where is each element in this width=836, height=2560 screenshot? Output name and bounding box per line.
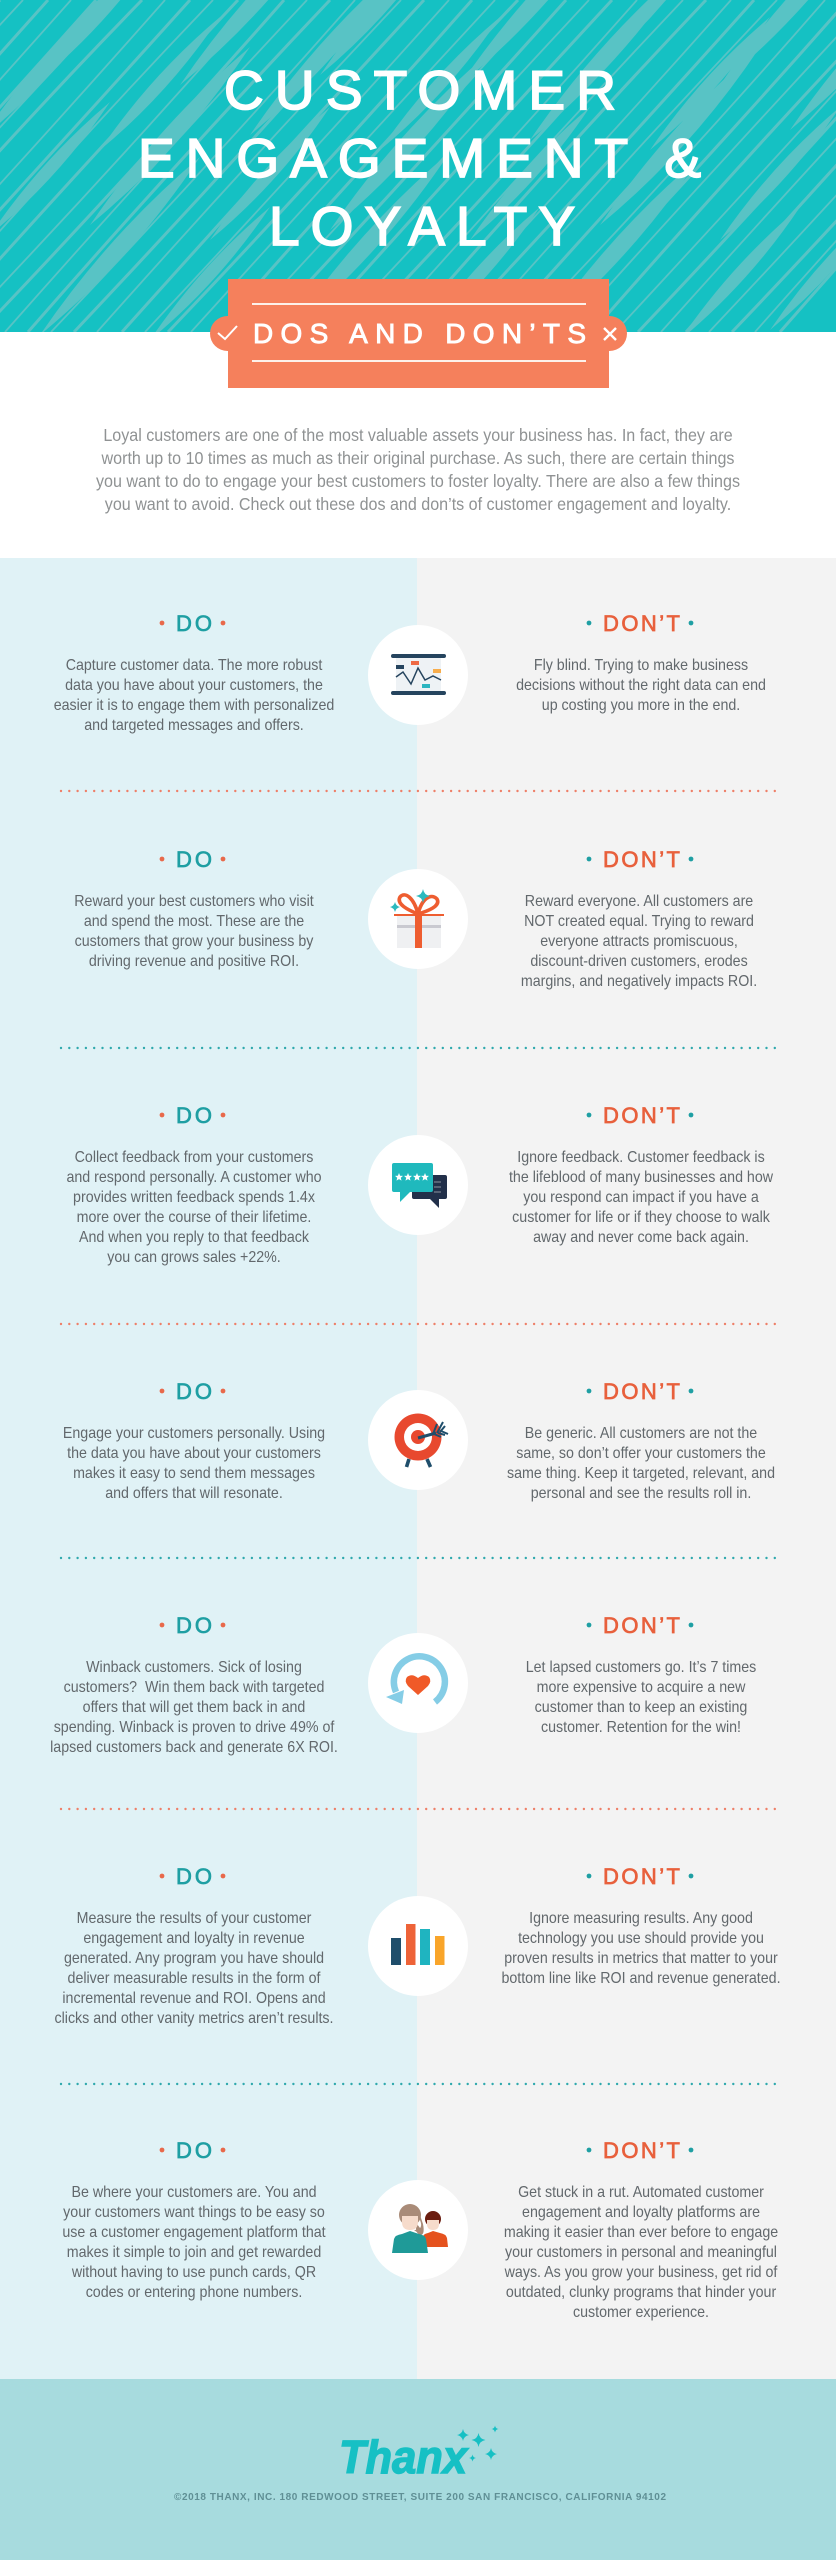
- don't text: [521, 892, 757, 990]
- intro paragraph: you want to avoid. Check out these dos and don’ts of customer engagement and loyalty.: [105, 494, 731, 514]
- don't text: engagement and loyalty platforms are: [522, 2203, 760, 2221]
- banner: dos and don'ts: [210, 279, 627, 388]
- don't text: same, so don’t offer your customers the: [516, 1444, 766, 1462]
- do text: And when you reply to that feedback: [79, 1228, 309, 1246]
- row 5: winback: [50, 1613, 757, 1756]
- don't text: up costing you more in the end.: [542, 696, 740, 714]
- row 3: feedback: [66, 1103, 773, 1266]
- icon: chart board: [368, 625, 468, 725]
- row 7: be where customers are: [62, 2138, 778, 2321]
- don't text: personal and see the results roll in.: [531, 1484, 751, 1502]
- don't text: the lifeblood of many businesses and how: [509, 1168, 773, 1186]
- do text: Collect feedback from your customers: [75, 1148, 314, 1166]
- do text: generated. Any program you have should: [64, 1949, 324, 1967]
- do text: Be where your customers are. You and: [71, 2183, 317, 2201]
- don't text: you respond can impact if you have a: [523, 1188, 759, 1206]
- DO heading: [160, 1379, 225, 1404]
- DO heading: DO: [176, 1379, 212, 1404]
- don't text: [526, 1658, 757, 1736]
- don't text: discount-driven customers, erodes: [530, 952, 748, 970]
- DO heading: DO: [176, 2138, 212, 2163]
- don't text: more expensive to acquire a new: [537, 1678, 745, 1696]
- don't text: [507, 1424, 775, 1502]
- DO heading: DO: [176, 1864, 212, 1889]
- do text: customers that grow your business by: [75, 932, 314, 950]
- footer background: [0, 2379, 836, 2560]
- header: [0, 0, 836, 388]
- do text: your customers want things to be easy so: [63, 2203, 325, 2221]
- icon: people: [368, 2180, 468, 2280]
- do text: clicks and other vanity metrics aren’t results.: [55, 2009, 333, 2027]
- DON'T heading: DON’T: [603, 611, 680, 636]
- don't text: margins, and negatively impacts ROI.: [521, 972, 757, 990]
- do text: and spend the most. These are the: [84, 912, 304, 930]
- row 4: personal engagement: [63, 1379, 775, 1502]
- do text: without having to use punch cards, QR: [71, 2263, 316, 2281]
- don't text: technology you use should provide you: [518, 1929, 764, 1947]
- title: CUSTOMER: [224, 59, 616, 121]
- DO heading: [160, 1103, 225, 1128]
- DON'T heading: DON’T: [603, 1103, 680, 1128]
- DO heading: DO: [176, 1613, 212, 1638]
- icon: bar chart: [368, 1896, 468, 1996]
- don't text: away and never come back again.: [533, 1228, 749, 1246]
- icon: check mark: [218, 326, 237, 339]
- don't text: Fly blind. Trying to make business: [534, 656, 749, 674]
- don't text: Ignore measuring results. Any good: [529, 1909, 753, 1927]
- DO heading: [160, 2138, 225, 2163]
- do text: engagement and loyalty in revenue: [83, 1929, 305, 1947]
- don't text: [509, 1148, 773, 1246]
- DON'T heading: DON’T: [603, 847, 680, 872]
- don't text: customer for life or if they choose to walk: [512, 1208, 770, 1226]
- do text: [55, 1909, 333, 2027]
- DON'T heading: DON’T: [603, 1864, 680, 1889]
- don't text: Get stuck in a rut. Automated customer: [518, 2183, 764, 2201]
- don't text: Be generic. All customers are not the: [525, 1424, 757, 1442]
- don't text: outdated, clunky programs that hinder your: [506, 2283, 776, 2301]
- don't text: bottom line like ROI and revenue generated.: [501, 1969, 781, 1987]
- icon: cross mark: [604, 328, 616, 340]
- do text: Reward your best customers who visit: [74, 892, 314, 910]
- logo: Thanx: Thanx: [339, 2431, 469, 2483]
- do text: use a customer engagement platform that: [62, 2223, 326, 2241]
- DO heading: DO: [176, 847, 212, 872]
- don't text: [516, 656, 766, 714]
- DO heading: DO: [176, 611, 212, 636]
- do text: makes it easy to send them messages: [73, 1464, 315, 1482]
- do text: data you have about your customers, the: [65, 676, 323, 694]
- DO heading: [160, 611, 225, 636]
- DO heading: DO: [176, 1103, 212, 1128]
- do text: the data you have about your customers: [67, 1444, 321, 1462]
- do text: [50, 1658, 338, 1756]
- don't text: same thing. Keep it targeted, relevant, and: [507, 1464, 775, 1482]
- don't text: customer experience.: [573, 2303, 709, 2321]
- do text: [54, 656, 334, 734]
- row 1: customer data: [54, 611, 766, 734]
- DON'T heading: DON’T: [603, 2138, 680, 2163]
- header background: [0, 0, 836, 340]
- do text: [74, 892, 314, 970]
- don't text: Ignore feedback. Customer feedback is: [517, 1148, 765, 1166]
- do text: lapsed customers back and generate 6X ROI.: [50, 1738, 338, 1756]
- title: [138, 59, 701, 257]
- do text: [66, 1148, 322, 1266]
- DO heading: [160, 1864, 225, 1889]
- don't text: Let lapsed customers go. It’s 7 times: [526, 1658, 757, 1676]
- DO heading: [160, 847, 225, 872]
- do text: and offers that will resonate.: [105, 1484, 283, 1502]
- don't text: NOT created equal. Trying to reward: [524, 912, 754, 930]
- banner: dos and don'ts: DOS AND DON’TS: [253, 318, 586, 349]
- do text: Measure the results of your customer: [77, 1909, 311, 1927]
- title: ENGAGEMENT &: [138, 127, 701, 189]
- don't text: ways. As you grow your business, get rid of: [504, 2263, 778, 2281]
- right panel background: [417, 558, 836, 2379]
- icon: return heart: [368, 1633, 468, 1733]
- DON'T heading: DON’T: [603, 1613, 680, 1638]
- do text: customers? Win them back with targeted: [64, 1678, 324, 1696]
- footer: [0, 2379, 836, 2560]
- intro paragraph: you want to do to engage your best customers to foster loyalty. There are also a few things: [96, 471, 740, 491]
- do text: incremental revenue and ROI. Opens and: [62, 1989, 326, 2007]
- title: LOYALTY: [269, 195, 575, 257]
- don't text: everyone attracts promiscuous,: [540, 932, 738, 950]
- DON'T heading: DON’T: [603, 1379, 680, 1404]
- row 6: measure: [55, 1864, 781, 2027]
- copyright: ©2018 THANX, INC. 180 REDWOOD STREET, SUITE 200 SAN FRANCISCO, CALIFORNIA 94102: [174, 2492, 666, 2503]
- icon: gift: [368, 869, 468, 969]
- DO heading: [160, 1613, 225, 1638]
- do text: Engage your customers personally. Using: [63, 1424, 325, 1442]
- icon: review bubbles: [368, 1135, 468, 1235]
- do text: and targeted messages and offers.: [84, 716, 304, 734]
- do text: provides written feedback spends 1.4x: [73, 1188, 315, 1206]
- don't text: proven results in metrics that matter to your: [504, 1949, 778, 1967]
- don't text: customer. Retention for the win!: [541, 1718, 741, 1736]
- left panel background: [0, 558, 417, 2379]
- don't text: [504, 2183, 778, 2321]
- don't text: [501, 1909, 781, 1987]
- do text: more over the course of their lifetime.: [77, 1208, 311, 1226]
- do text: easier it is to engage them with personalized: [54, 696, 334, 714]
- intro paragraph: Loyal customers are one of the most valuable assets your business has. In fact, they are: [103, 425, 733, 445]
- do text: deliver measurable results in the form of: [68, 1969, 321, 1987]
- icon: target: [368, 1390, 468, 1490]
- intro paragraph: [96, 425, 740, 514]
- don't text: customer than to keep an existing: [535, 1698, 747, 1716]
- don't text: decisions without the right data can end: [516, 676, 766, 694]
- do text: and respond personally. A customer who: [66, 1168, 322, 1186]
- don't text: Reward everyone. All customers are: [525, 892, 753, 910]
- do text: makes it simple to join and get rewarded: [67, 2243, 321, 2261]
- do text: you can grows sales +22%.: [107, 1248, 281, 1266]
- do text: Capture customer data. The more robust: [66, 656, 323, 674]
- do text: [62, 2183, 326, 2301]
- intro paragraph: worth up to 10 times as much as their original purchase. As such, there are certain things: [101, 448, 734, 468]
- do text: driving revenue and positive ROI.: [89, 952, 299, 970]
- do text: spending. Winback is proven to drive 49% of: [54, 1718, 335, 1736]
- do text: codes or entering phone numbers.: [86, 2283, 302, 2301]
- do text: [63, 1424, 325, 1502]
- row 2: rewards: [74, 847, 757, 990]
- do text: offers that will get them back in and: [83, 1698, 305, 1716]
- do text: Winback customers. Sick of losing: [86, 1658, 302, 1676]
- don't text: your customers in personal and meaningful: [505, 2243, 777, 2261]
- don't text: making it easier than ever before to engage: [504, 2223, 778, 2241]
